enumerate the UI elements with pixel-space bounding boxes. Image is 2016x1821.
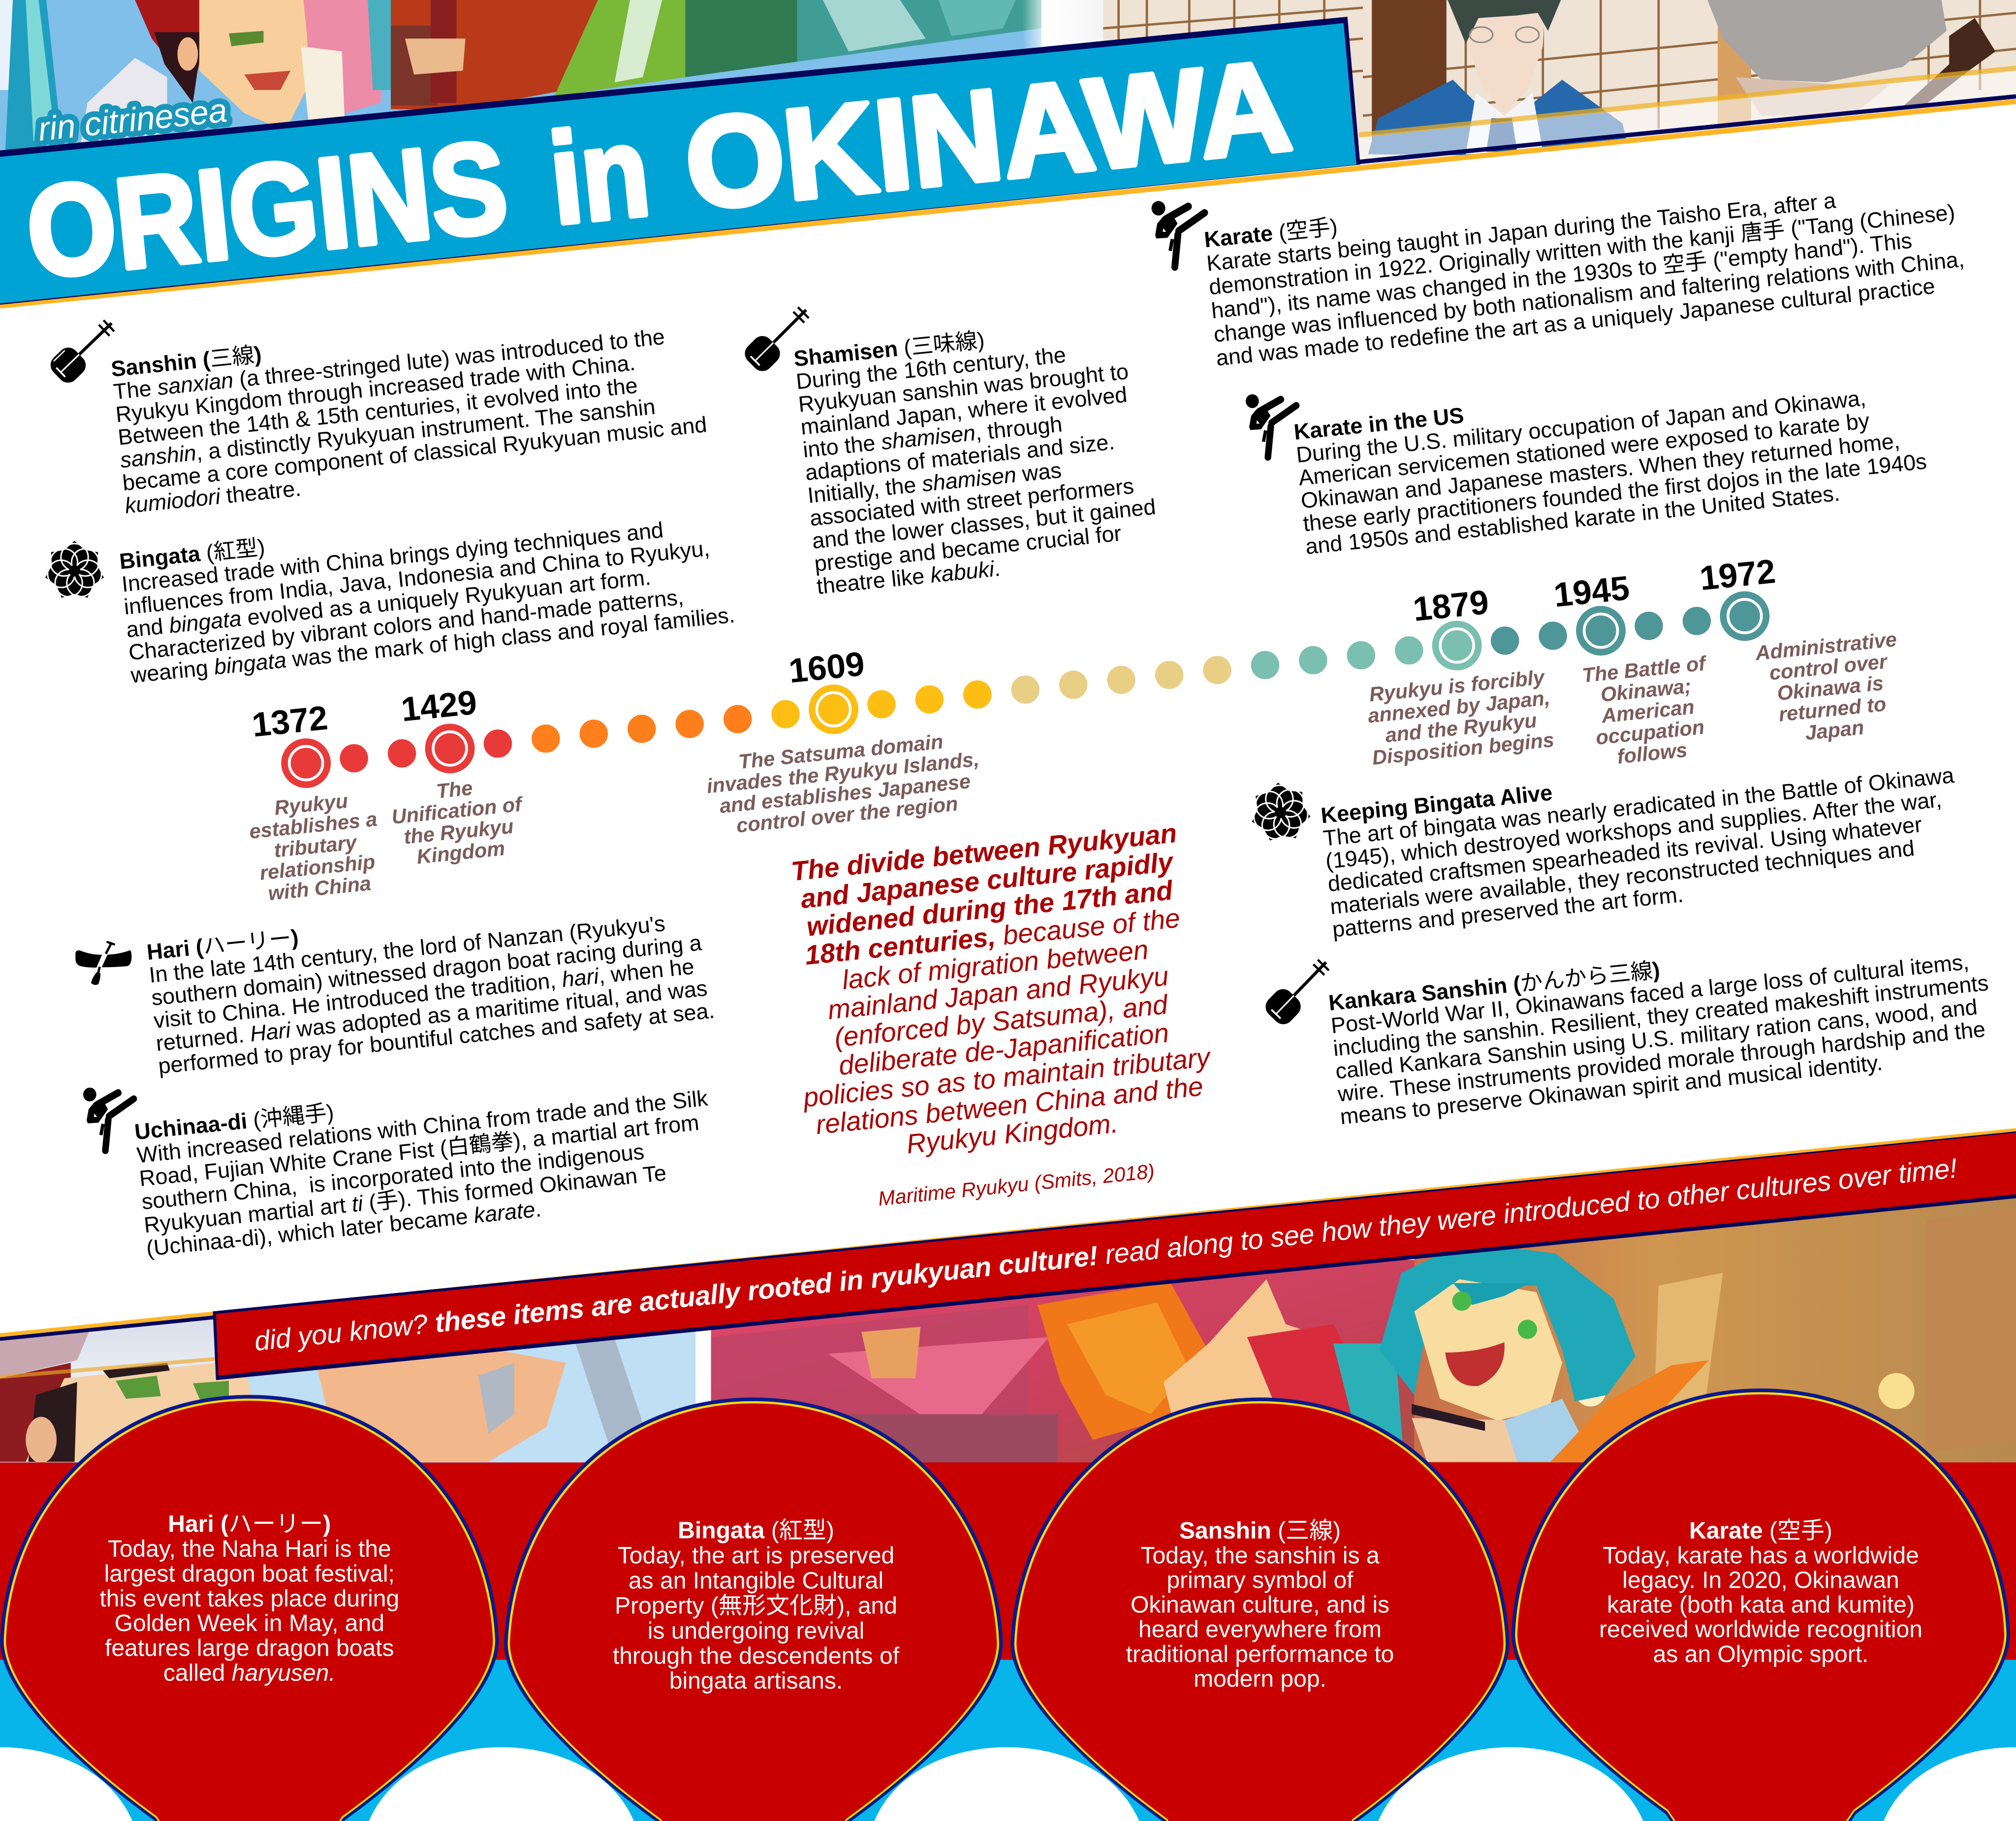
- fan text: Hari: this event takes place during: [99, 1584, 399, 1611]
- fan text: Hari: Hari (ハーリー): [168, 1510, 331, 1537]
- caption 1372: Ryukyu: [273, 791, 349, 820]
- fan text: Bingata: as an Intangible Cultural: [629, 1567, 883, 1594]
- caption 1879: and the Ryukyu: [1385, 710, 1538, 748]
- text: Kankara Sanshin: [1326, 924, 1996, 1130]
- icon: canoe and paddle: [75, 942, 131, 985]
- text: Uchinaa-di: [133, 1062, 719, 1261]
- icon: shamisen: [741, 299, 817, 376]
- year 1879: 1879: [1411, 583, 1490, 628]
- caption 1972: Japan: [1804, 718, 1865, 745]
- text: Shamisen: Shamisen (三味線): [792, 327, 986, 372]
- caption 1372: tributary: [273, 832, 359, 862]
- panel: Keeping Bingata Alive: [1249, 739, 1965, 942]
- icon: karate kick: [83, 1088, 134, 1151]
- fan text: Sanshin: Sanshin (三線): [1179, 1517, 1341, 1544]
- text: Kankara Sanshin: including the sanshin. Resilient, they created makeshift instruments: [1332, 970, 1989, 1061]
- text: Keeping Bingata Alive: materials were available, they reconstructed techniques and: [1329, 835, 1916, 919]
- fan text: Karate: [1599, 1517, 1922, 1667]
- callout: divide between Ryukyuan and Japanese culture: The divide between Ryukyuan: [790, 819, 1178, 887]
- caption 1879: annexed by Japan,: [1367, 688, 1551, 728]
- fan text: Sanshin: Okinawan culture, and is: [1131, 1591, 1389, 1618]
- fan text: Sanshin: traditional performance to: [1126, 1640, 1394, 1667]
- text: Sanshin: kumiodori theatre.: [124, 475, 302, 518]
- text: Hari: In the late 14th century, the lord of Nanzan (Ryukyu's: [148, 910, 666, 988]
- callout: divide between Ryukyuan and Japanese culture: policies so as to maintain tributary: [801, 1043, 1213, 1113]
- caption 1945: American: [1600, 697, 1696, 728]
- text: Uchinaa-di: Ryukyuan martial art ti (手). This formed Okinawan Te: [143, 1160, 667, 1238]
- caption 1879: Ryukyu is forcibly: [1368, 667, 1547, 707]
- text: Bingata: and bingata evolved as a uniquely Ryukyuan art form.: [125, 564, 652, 642]
- fan text: Hari: Today, the Naha Hari is the: [108, 1535, 391, 1562]
- callout: divide between Ryukyuan and Japanese culture: mainland Japan and Ryukyu: [826, 962, 1170, 1026]
- text: Sanshin: sanshin, a distinctly Ryukyuan instrument. The sanshin: [119, 393, 657, 473]
- panel: Karate in the US: [1246, 356, 1930, 559]
- did you know banner: [213, 1131, 2016, 1380]
- caption 1372: relationship: [259, 852, 377, 885]
- caption 1879: [1365, 667, 1555, 770]
- text: Karate: [1203, 151, 1968, 371]
- text: Hari: returned. Hari was adopted as a maritime ritual, and was: [155, 975, 708, 1056]
- caption 1945: The Battle of: [1581, 653, 1709, 688]
- banner text: did you know? these items are actually rooted in ryukyuan culture! read along to see how they were introduced to other cultures over time!: [253, 1153, 1958, 1357]
- caption 1945: occupation: [1595, 717, 1706, 750]
- fan text: Sanshin: Today, the sanshin is a: [1140, 1541, 1381, 1569]
- caption 1429: [388, 773, 529, 871]
- text: Uchinaa-di: southern China, is incorporated into the indigenous: [140, 1138, 645, 1215]
- text: Keeping Bingata Alive: Keeping Bingata Alive: [1320, 780, 1553, 828]
- credit: rin citrinesea: [36, 91, 229, 149]
- title: in: [544, 99, 656, 252]
- fan text: Bingata: Bingata (紅型): [678, 1516, 834, 1543]
- caption 1372: establishes a: [249, 809, 378, 844]
- text: Sanshin: became a core component of classical Ryukyuan music and: [121, 411, 708, 496]
- text: Shamisen: into the shamisen, through: [802, 411, 1064, 463]
- text: Uchinaa-di: With increased relations with China from trade and the Silk: [136, 1085, 709, 1168]
- text: Shamisen: During the 16th century, the: [795, 342, 1067, 394]
- text: Keeping Bingata Alive: patterns and preserved the art form.: [1331, 881, 1684, 942]
- fan text: Karate: legacy. In 2020, Okinawan: [1622, 1566, 1899, 1593]
- text: Bingata: influences from India, Java, Indonesia and China to Ryukyu,: [123, 535, 711, 620]
- caption 1429: Kingdom: [416, 838, 506, 869]
- text: Hari: visit to China. He introduced the tradition, hari, when he: [153, 953, 695, 1033]
- caption 1429: the Ryukyu: [403, 816, 515, 849]
- text: Kankara Sanshin: means to preserve Okinawan spirit and musical identity.: [1339, 1049, 1884, 1130]
- bottom artwork: left scene: [0, 1319, 696, 1463]
- text: Uchinaa-di: Uchinaa-di (沖縄手): [133, 1099, 335, 1145]
- caption 1372: [246, 788, 385, 907]
- caption 1609: and establishes Japanese: [719, 771, 972, 818]
- callout: divide between Ryukyuan and Japanese culture: widened during the 17th and: [805, 876, 1175, 942]
- caption 1372: with China: [267, 873, 372, 906]
- text: Bingata: wearing bingata was the mark of high class and royal families.: [128, 601, 736, 688]
- text: Sanshin: Ryukyu Kingdom through increased trade with China.: [114, 349, 636, 427]
- panel: Sanshin: [46, 297, 710, 518]
- fan: Bingata: [504, 1398, 1003, 1821]
- text: Shamisen: Initially, the shamisen was: [806, 457, 1063, 508]
- caption 1972: [1753, 629, 1907, 750]
- header artwork: left scene: [0, 0, 1103, 167]
- caption 1429: Unification of: [391, 794, 525, 829]
- fan text: Sanshin: [1126, 1517, 1394, 1692]
- callout: divide between Ryukyuan and Japanese culture: (enforced by Satsuma), and: [833, 990, 1170, 1053]
- panel: Uchinaa-di: [83, 1062, 719, 1261]
- text: Uchinaa-di: Road, Fujian White Crane Fist (白鶴拳), a martial art from: [138, 1109, 700, 1192]
- fan text: Karate: as an Olympic sport.: [1653, 1640, 1868, 1667]
- fan: Karate: [1512, 1388, 2010, 1821]
- year 1972: 1972: [1698, 552, 1777, 598]
- header gold and navy rules: [0, 96, 2016, 306]
- caption 1609: The Satsuma domain: [738, 731, 945, 774]
- callout: divide between Ryukyuan and Japanese culture: relations between China and the: [815, 1072, 1204, 1140]
- text: Karate in the US: and 1950s and established karate in the United States.: [1304, 480, 1841, 559]
- text: Karate: Karate starts being taught in Japan during the Taisho Era, after a: [1205, 187, 1837, 276]
- text: Shamisen: mainland Japan, where it evolved: [799, 381, 1128, 440]
- text: Keeping Bingata Alive: dedicated craftsmen spearheaded its revival. Using whatever: [1326, 811, 1923, 897]
- fan text: Karate: karate (both kata and kumite): [1607, 1591, 1915, 1618]
- callout: divide between Ryukyuan and Japanese culture: deliberate de-Japanification: [837, 1019, 1170, 1081]
- fan text: Hari: [99, 1510, 399, 1686]
- text: Karate in the US: these early practitioners founded the first dojos in the late 1940s: [1302, 448, 1928, 536]
- text: Uchinaa-di: (Uchinaa-di), which later became karate.: [145, 1196, 542, 1261]
- callout: divide between Ryukyuan and Japanese culture: [778, 817, 1219, 1170]
- citation: Maritime Ryukyu (Smits, 2018): [877, 1162, 1156, 1211]
- caption 1429: The: [436, 778, 474, 803]
- text: Sanshin: Sanshin (三線): [110, 341, 263, 382]
- panel: Karate: [1152, 151, 1968, 371]
- caption 1972: Okinawa is: [1776, 673, 1885, 706]
- icon: karate kick: [1152, 201, 1204, 267]
- fan text: Hari: features large dragon boats: [105, 1634, 394, 1661]
- text: Shamisen: associated with street performers: [809, 473, 1135, 531]
- text: Karate in the US: Karate in the US: [1292, 402, 1465, 445]
- panel: Hari: [75, 883, 716, 1079]
- caption 1945: [1581, 653, 1717, 772]
- text: Kankara Sanshin: Post-World War II, Okinawans faced a large loss of cultural items,: [1330, 948, 1970, 1038]
- fan text: Hari: Golden Week in May, and: [115, 1609, 384, 1636]
- fan text: Hari: called haryusen.: [163, 1659, 336, 1686]
- caption 1972: control over: [1768, 652, 1889, 685]
- text: Hari: [146, 883, 716, 1079]
- title: OKINAWA: [679, 33, 1297, 238]
- bottom band: red and cyan background: [0, 1462, 2016, 1821]
- text: Kankara Sanshin: wire. These instruments provided morale through hardship and the: [1335, 1016, 1986, 1107]
- white arches: [0, 1747, 2016, 1821]
- year 1372: 1372: [250, 698, 329, 744]
- header artwork: right scene: [1103, 0, 2016, 174]
- callout: divide between Ryukyuan and Japanese culture: lack of migration between: [841, 936, 1150, 996]
- text: Bingata: [117, 488, 736, 688]
- caption 1945: Okinawa;: [1600, 676, 1692, 707]
- text: Karate: Karate (空手): [1203, 214, 1339, 252]
- caption 1972: Administrative: [1753, 629, 1898, 665]
- caption 1879: Disposition begins: [1371, 730, 1555, 770]
- fan text: Sanshin: modern pop.: [1194, 1665, 1326, 1692]
- fan: Sanshin: [1010, 1398, 1510, 1821]
- text: Bingata: Characterized by vibrant colors and hand-made patterns,: [127, 584, 685, 665]
- fan text: Bingata: is undergoing revival: [648, 1617, 864, 1644]
- timeline dots: [281, 591, 1769, 788]
- text: Sanshin: The sanxian (a three-stringed lute) was introduced to the: [112, 323, 666, 405]
- bottom rules: [0, 1130, 2016, 1377]
- fan text: Karate: Today, karate has a worldwide: [1603, 1541, 1919, 1569]
- panel: Kankara Sanshin: [1261, 924, 1996, 1130]
- fan text: Hari: largest dragon boat festival;: [104, 1560, 395, 1587]
- fan: Hari: [0, 1395, 499, 1821]
- callout: divide between Ryukyuan and Japanese culture: 18th centuries, because of the: [804, 904, 1182, 971]
- text: Shamisen: and the lower classes, but it gained: [811, 494, 1157, 554]
- caption 1972: returned to: [1778, 694, 1888, 726]
- year 1945: 1945: [1552, 568, 1631, 615]
- text: Keeping Bingata Alive: (1945), which destroyed workshops and supplies. After the war,: [1324, 786, 1943, 874]
- fan text: Bingata: Today, the art is preserved: [618, 1541, 894, 1569]
- text: Karate in the US: During the U.S. military occupation of Japan and Okinawa,: [1295, 385, 1867, 468]
- fan text: Sanshin: primary symbol of: [1166, 1566, 1354, 1593]
- icon: sanshin: [46, 312, 123, 387]
- text: Shamisen: adaptions of materials and size.: [804, 429, 1116, 485]
- callout: divide between Ryukyuan and Japanese culture: Ryukyu Kingdom.: [905, 1109, 1120, 1160]
- text: Shamisen: [792, 312, 1162, 599]
- timeline: [246, 552, 1907, 907]
- text: Shamisen: Ryukyuan sanshin was brought to: [797, 358, 1130, 417]
- text: Keeping Bingata Alive: The art of bingata was nearly eradicated in the Battle of Okinawa: [1322, 762, 1956, 851]
- text: Karate in the US: [1292, 356, 1930, 559]
- translucent stripe over right scene: [1359, 68, 2016, 163]
- title: ORIGINS: [21, 114, 513, 306]
- year 1609: 1609: [787, 644, 866, 691]
- text: Hari: Hari (ハーリー): [146, 924, 300, 965]
- icon: bingata flower: [45, 541, 104, 598]
- callout: divide between Ryukyuan and Japanese culture: and Japanese culture rapidly: [799, 848, 1176, 914]
- text: Karate: change was influenced by both nationalism and faltering relations with China,: [1212, 246, 1965, 347]
- text: Keeping Bingata Alive: [1320, 739, 1965, 942]
- icon: karate kick: [1246, 394, 1296, 457]
- caption 1609: control over the region: [735, 794, 959, 838]
- text: Sanshin: Between the 14th & 15th centuries, it evolved into the: [117, 372, 639, 450]
- text: Kankara Sanshin: Kankara Sanshin (かんから三線): [1327, 957, 1661, 1016]
- caption 1945: follows: [1616, 740, 1689, 769]
- text: Karate: and was made to redefine the art as a uniquely Japanese cultural practice: [1215, 273, 1936, 371]
- text: Karate: demonstration in 1922. Originally written with the kanji 唐手 ("Tang (Chinese): [1208, 199, 1956, 300]
- icon: kankara sanshin: [1261, 951, 1337, 1029]
- fan text: Bingata: bingata artisans.: [669, 1667, 843, 1694]
- caption 1609: invades the Ryukyu Islands,: [706, 749, 980, 798]
- year 1429: 1429: [399, 683, 478, 729]
- panel: Bingata: [45, 488, 736, 688]
- title: [21, 33, 1297, 306]
- text: Karate in the US: American servicemen stationed were exposed to karate by: [1297, 408, 1871, 491]
- bottom artwork: right scene: [711, 1198, 2016, 1463]
- text: Hari: performed to pray for bountiful catches and safety at sea.: [157, 997, 716, 1079]
- fan text: Bingata: [613, 1516, 900, 1694]
- header banner: [0, 17, 1360, 306]
- text: Shamisen: prestige and became crucial for: [813, 520, 1123, 576]
- text: Bingata: Increased trade with China brings dying techniques and: [121, 517, 664, 597]
- fan text: Bingata: through the descendents of: [613, 1642, 900, 1669]
- text: Hari: southern domain) witnessed dragon boat racing during a: [150, 930, 703, 1010]
- icon: bingata flower: [1249, 780, 1312, 842]
- text: Bingata: Bingata (紅型): [118, 534, 266, 574]
- fan text: Karate: received worldwide recognition: [1599, 1615, 1922, 1642]
- fan text: Sanshin: heard everywhere from: [1138, 1615, 1382, 1642]
- text: Karate in the US: Okinawan and Japanese masters. When they returned home,: [1299, 428, 1901, 513]
- text: Shamisen: theatre like kabuki.: [816, 555, 1002, 599]
- text: Sanshin: [110, 297, 710, 518]
- text: Karate: hand"), its name was changed in the 1930s to 空手 ("empty hand"). This: [1210, 227, 1913, 323]
- text: Kankara Sanshin: called Kankara Sanshin using U.S. military ration cans, wood, and: [1334, 994, 1979, 1084]
- caption 1609: [704, 728, 984, 840]
- fan text: Bingata: Property (無形文化財), and: [615, 1592, 897, 1619]
- fan text: Karate: Karate (空手): [1689, 1517, 1832, 1544]
- panel: Shamisen: [741, 299, 1162, 599]
